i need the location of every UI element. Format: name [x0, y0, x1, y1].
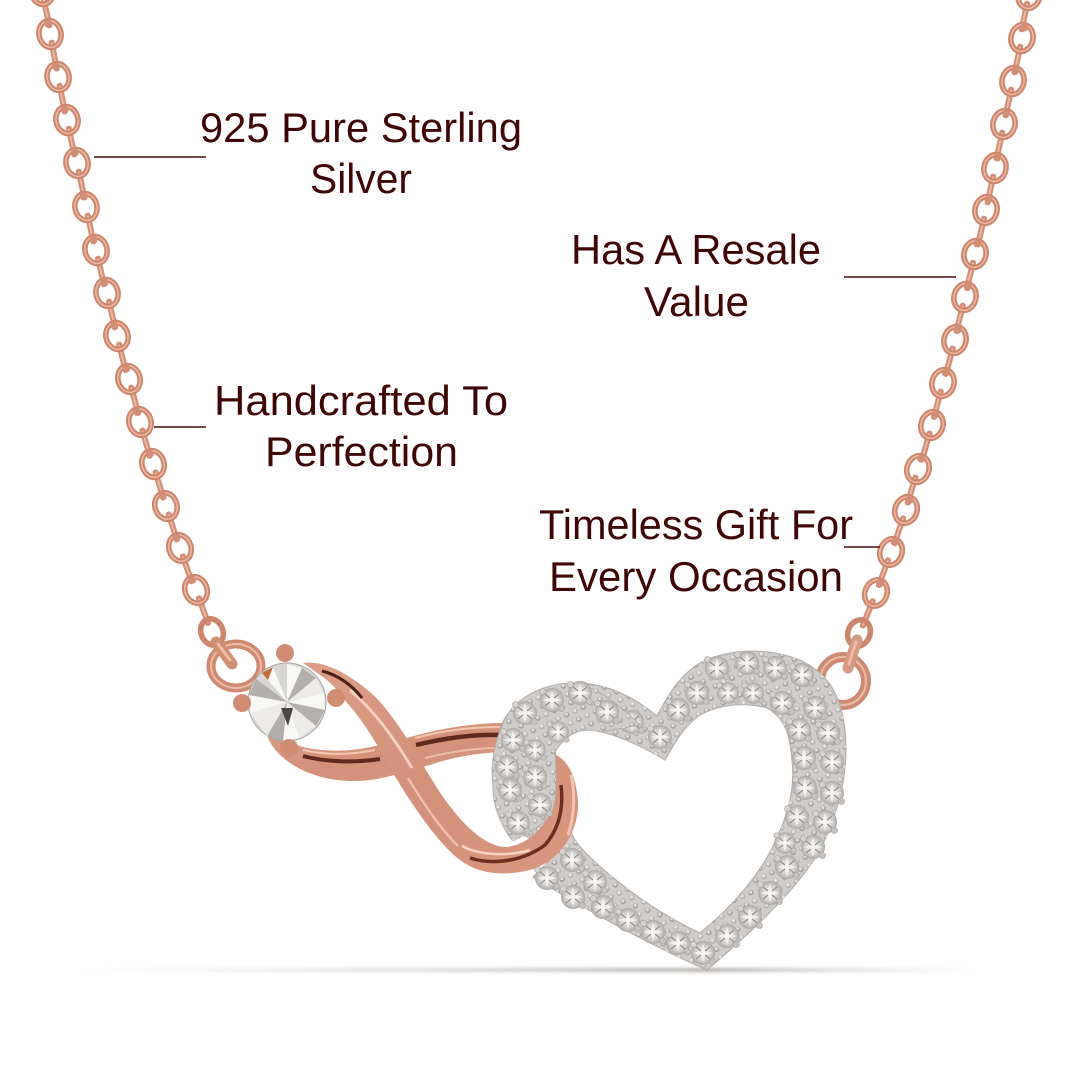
- callout: has a resale value: [571, 226, 956, 325]
- callout: has a resale value: Has A Resale: [571, 226, 821, 273]
- callout: 925 pure sterling silver: Silver: [310, 155, 412, 202]
- callout: 925 pure sterling silver: [94, 104, 522, 202]
- callout: timeless gift for every occasion: [539, 501, 880, 600]
- floor shadow: [80, 968, 980, 972]
- left jump ring: [211, 642, 261, 688]
- callout: has a resale value: Value: [644, 278, 749, 325]
- infinity loop lower strand: [267, 723, 502, 781]
- callout: handcrafted to perfection: Handcrafted To: [214, 377, 508, 424]
- right jump ring: [820, 640, 866, 705]
- callout: 925 pure sterling silver: 925 Pure Sterling: [200, 104, 522, 151]
- infinity loop main strand: [303, 663, 578, 873]
- solitaire diamond with prongs: [233, 644, 345, 757]
- left chain: [28, 0, 227, 649]
- callout: handcrafted to perfection: Perfection: [265, 428, 458, 475]
- callout: timeless gift for every occasion: Every Occasion: [549, 553, 843, 600]
- heart pendant with pave diamonds: [493, 651, 846, 970]
- heart left lobe over loop: [492, 681, 640, 841]
- callout: handcrafted to perfection: [154, 377, 508, 475]
- callout: timeless gift for every occasion: Timeless Gift For: [539, 501, 853, 548]
- right chain: [844, 0, 1043, 650]
